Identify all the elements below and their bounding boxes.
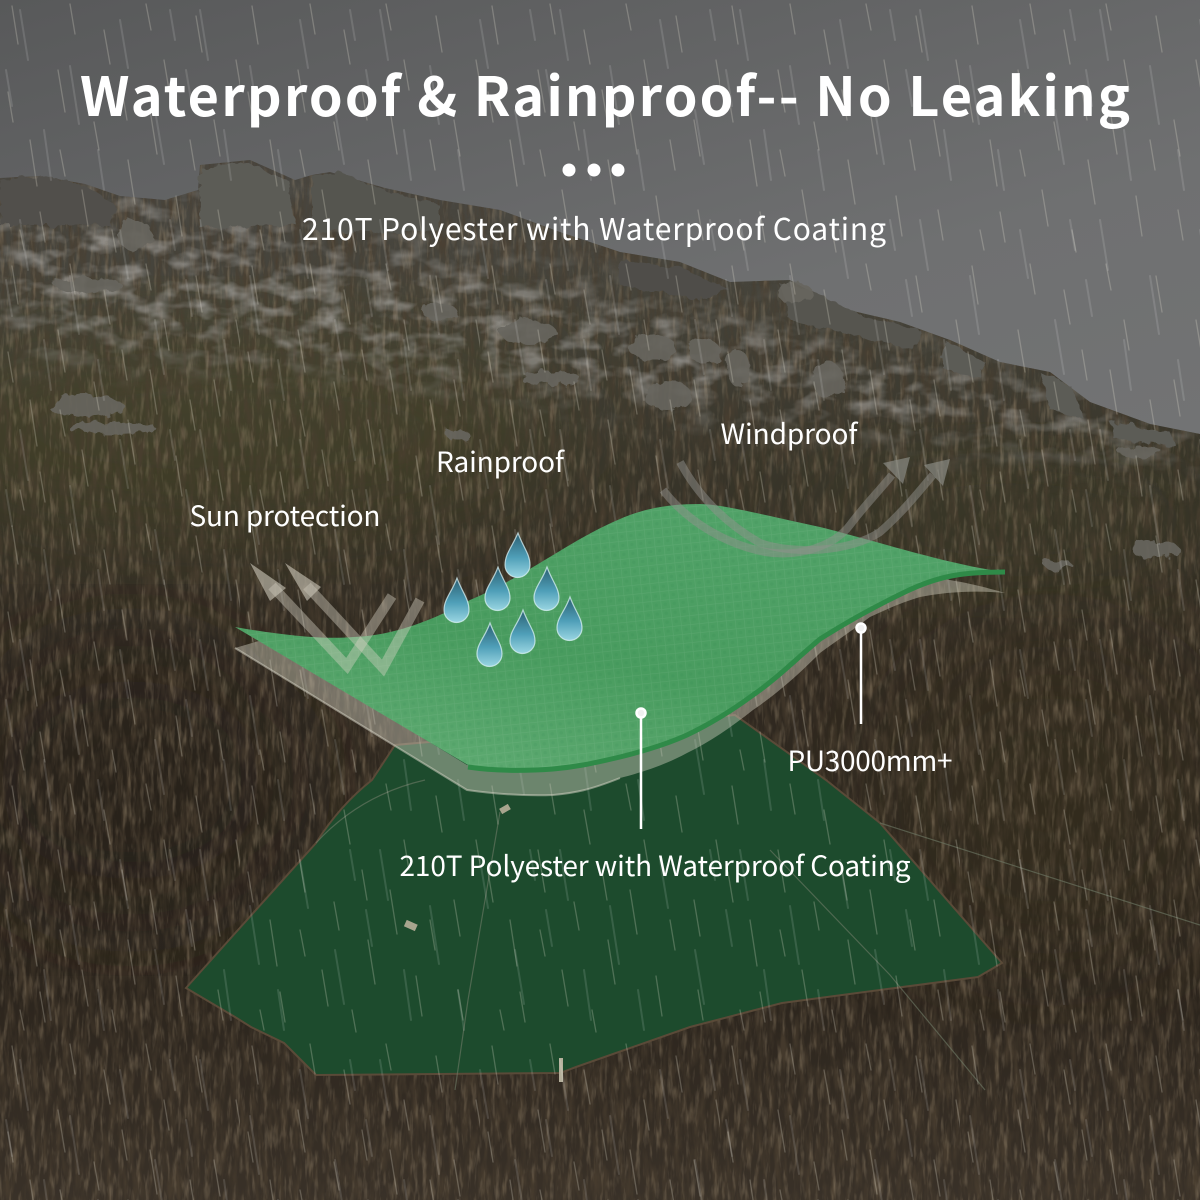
icon: windproof curved arrows (663, 457, 950, 553)
icon: sun protection reflected arrows (250, 563, 420, 668)
three dots (562, 164, 624, 176)
icon: rain drops (444, 533, 582, 666)
title: Waterproof & Rainproof-- No Leaking (80, 53, 1130, 132)
ridge rocks (0, 164, 1175, 445)
label: PU3000mm+: PU3000mm+ (788, 740, 952, 780)
label: polyester fabric: 210T Polyester with Waterproof Coating (400, 845, 911, 885)
tent flysheet (186, 715, 1200, 1090)
fabric layer: green polyester (235, 504, 1005, 770)
label: Windproof: Windproof (720, 413, 858, 453)
label: Rainproof: Rainproof (436, 441, 565, 481)
callout: polyester pointer (636, 708, 646, 829)
label: Sun protection: Sun protection (190, 495, 380, 535)
scattered boulders (48, 220, 1179, 570)
callout: PU coating pointer (856, 624, 866, 724)
fabric layer: PU coating (235, 578, 1005, 795)
subtitle: 210T Polyester with Waterproof Coating (302, 205, 886, 249)
